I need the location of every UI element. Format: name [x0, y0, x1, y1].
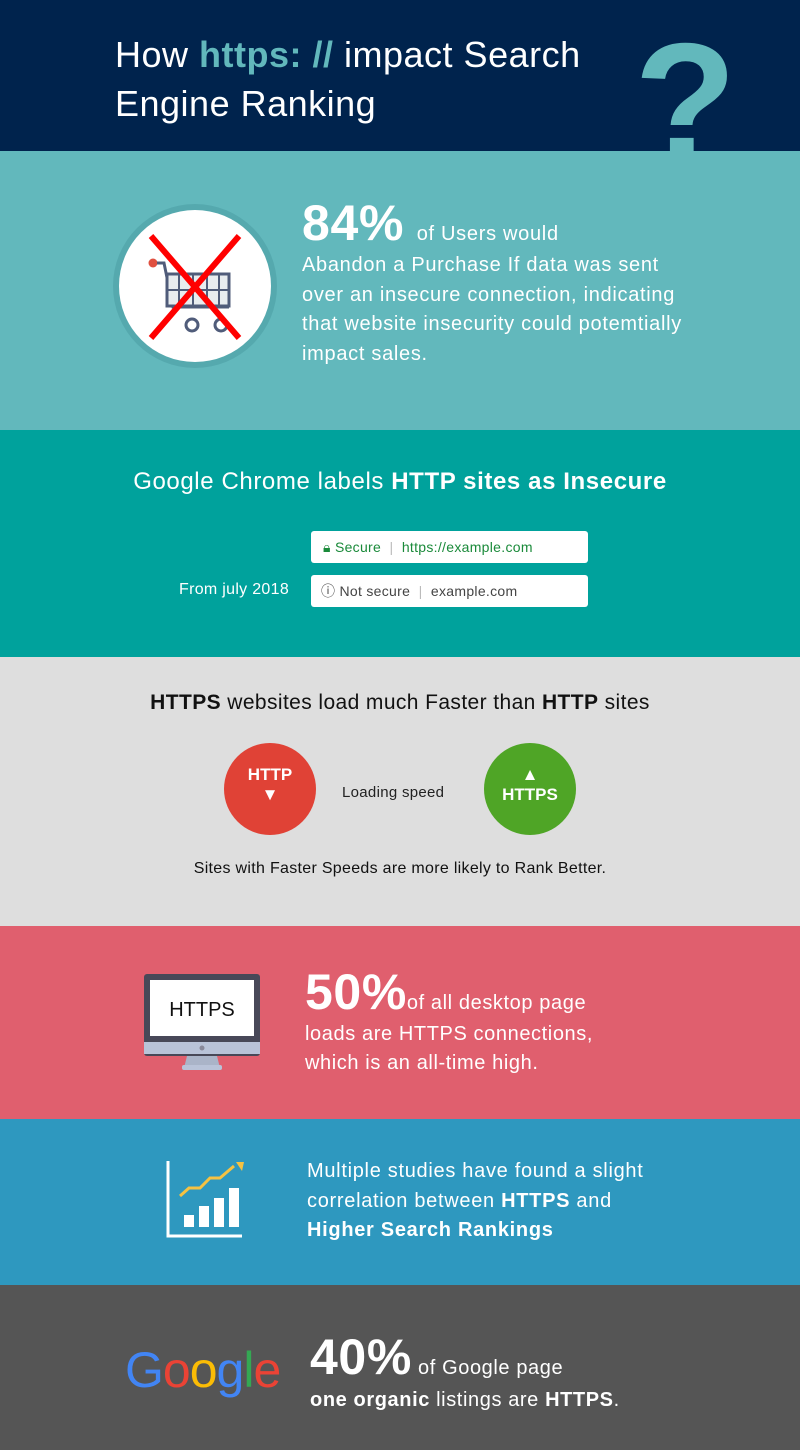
text: 40% stat: 40% of Google page: [310, 1329, 563, 1385]
panel: 50% desktop: [0, 926, 800, 1119]
icon: http circle: HTTP: [248, 765, 292, 784]
address bar: secure: 🔒︎ Secure | https://example.com: [323, 539, 533, 555]
text: 40% stat: [310, 1329, 620, 1411]
text: 84% stat: [302, 195, 682, 364]
text: 84% stat: that website insecurity could potemtially: [302, 313, 682, 335]
address bar: not secure: ⓘ Not secure | example.com: [321, 583, 517, 599]
text: 50% stat: 50%of all desktop page: [305, 964, 586, 1020]
icon: https circle: ▲: [522, 765, 538, 784]
label: loading speed: Loading speed: [342, 784, 444, 801]
icon: crossed cart: [113, 204, 277, 368]
title: How https: // impact Search: [115, 34, 581, 75]
text: 50% stat: loads are HTTPS connections,: [305, 1023, 593, 1045]
panel: loading speed: [0, 657, 800, 926]
text: 50% stat: [305, 964, 593, 1074]
text: 50% stat: which is an all-time high.: [305, 1052, 538, 1074]
icon: https circle: [484, 743, 576, 835]
header: [0, 0, 800, 151]
title: Engine Ranking: [115, 83, 376, 124]
text: correlation: Multiple studies have found a slight: [307, 1160, 644, 1182]
heading: HTTPS websites load much Faster than HTTP sites: [150, 691, 650, 714]
text: correlation: Higher Search Rankings: [307, 1219, 554, 1241]
panel: correlation: [0, 1119, 800, 1285]
text: correlation: correlation between HTTPS and: [307, 1190, 612, 1212]
icon: http circle: ▼: [262, 785, 278, 804]
panel: chrome labels: [0, 430, 800, 657]
text: 84% stat: impact sales.: [302, 342, 428, 364]
text: 84% stat: over an insecure connection, indicating: [302, 284, 675, 306]
address bar: secure: [311, 531, 588, 563]
address bar: not secure: [311, 575, 588, 607]
text: 84% stat: Abandon a Purchase If data was sent: [302, 254, 659, 276]
label: from july 2018: From july 2018: [179, 581, 289, 598]
icon: https circle: HTTPS: [502, 785, 558, 804]
text: 40% stat: one organic listings are HTTPS.: [310, 1389, 620, 1411]
icon: growth chart: [166, 1161, 244, 1238]
logo: google: Google: [125, 1342, 280, 1398]
panel: abandon purchase: [0, 151, 800, 430]
heading: Google Chrome labels HTTP sites as Insecure: [133, 468, 667, 495]
title: [115, 34, 581, 124]
icon: http circle: [224, 743, 316, 835]
icon: monitor: [144, 974, 260, 1070]
text: 84% stat: 84% of Users would: [302, 195, 559, 251]
caption: Sites with Faster Speeds are more likely to Rank Better.: [194, 860, 606, 877]
text: correlation: [307, 1160, 644, 1241]
icon: monitor: HTTPS: [169, 999, 235, 1021]
panel: google 40%: [0, 1285, 800, 1450]
